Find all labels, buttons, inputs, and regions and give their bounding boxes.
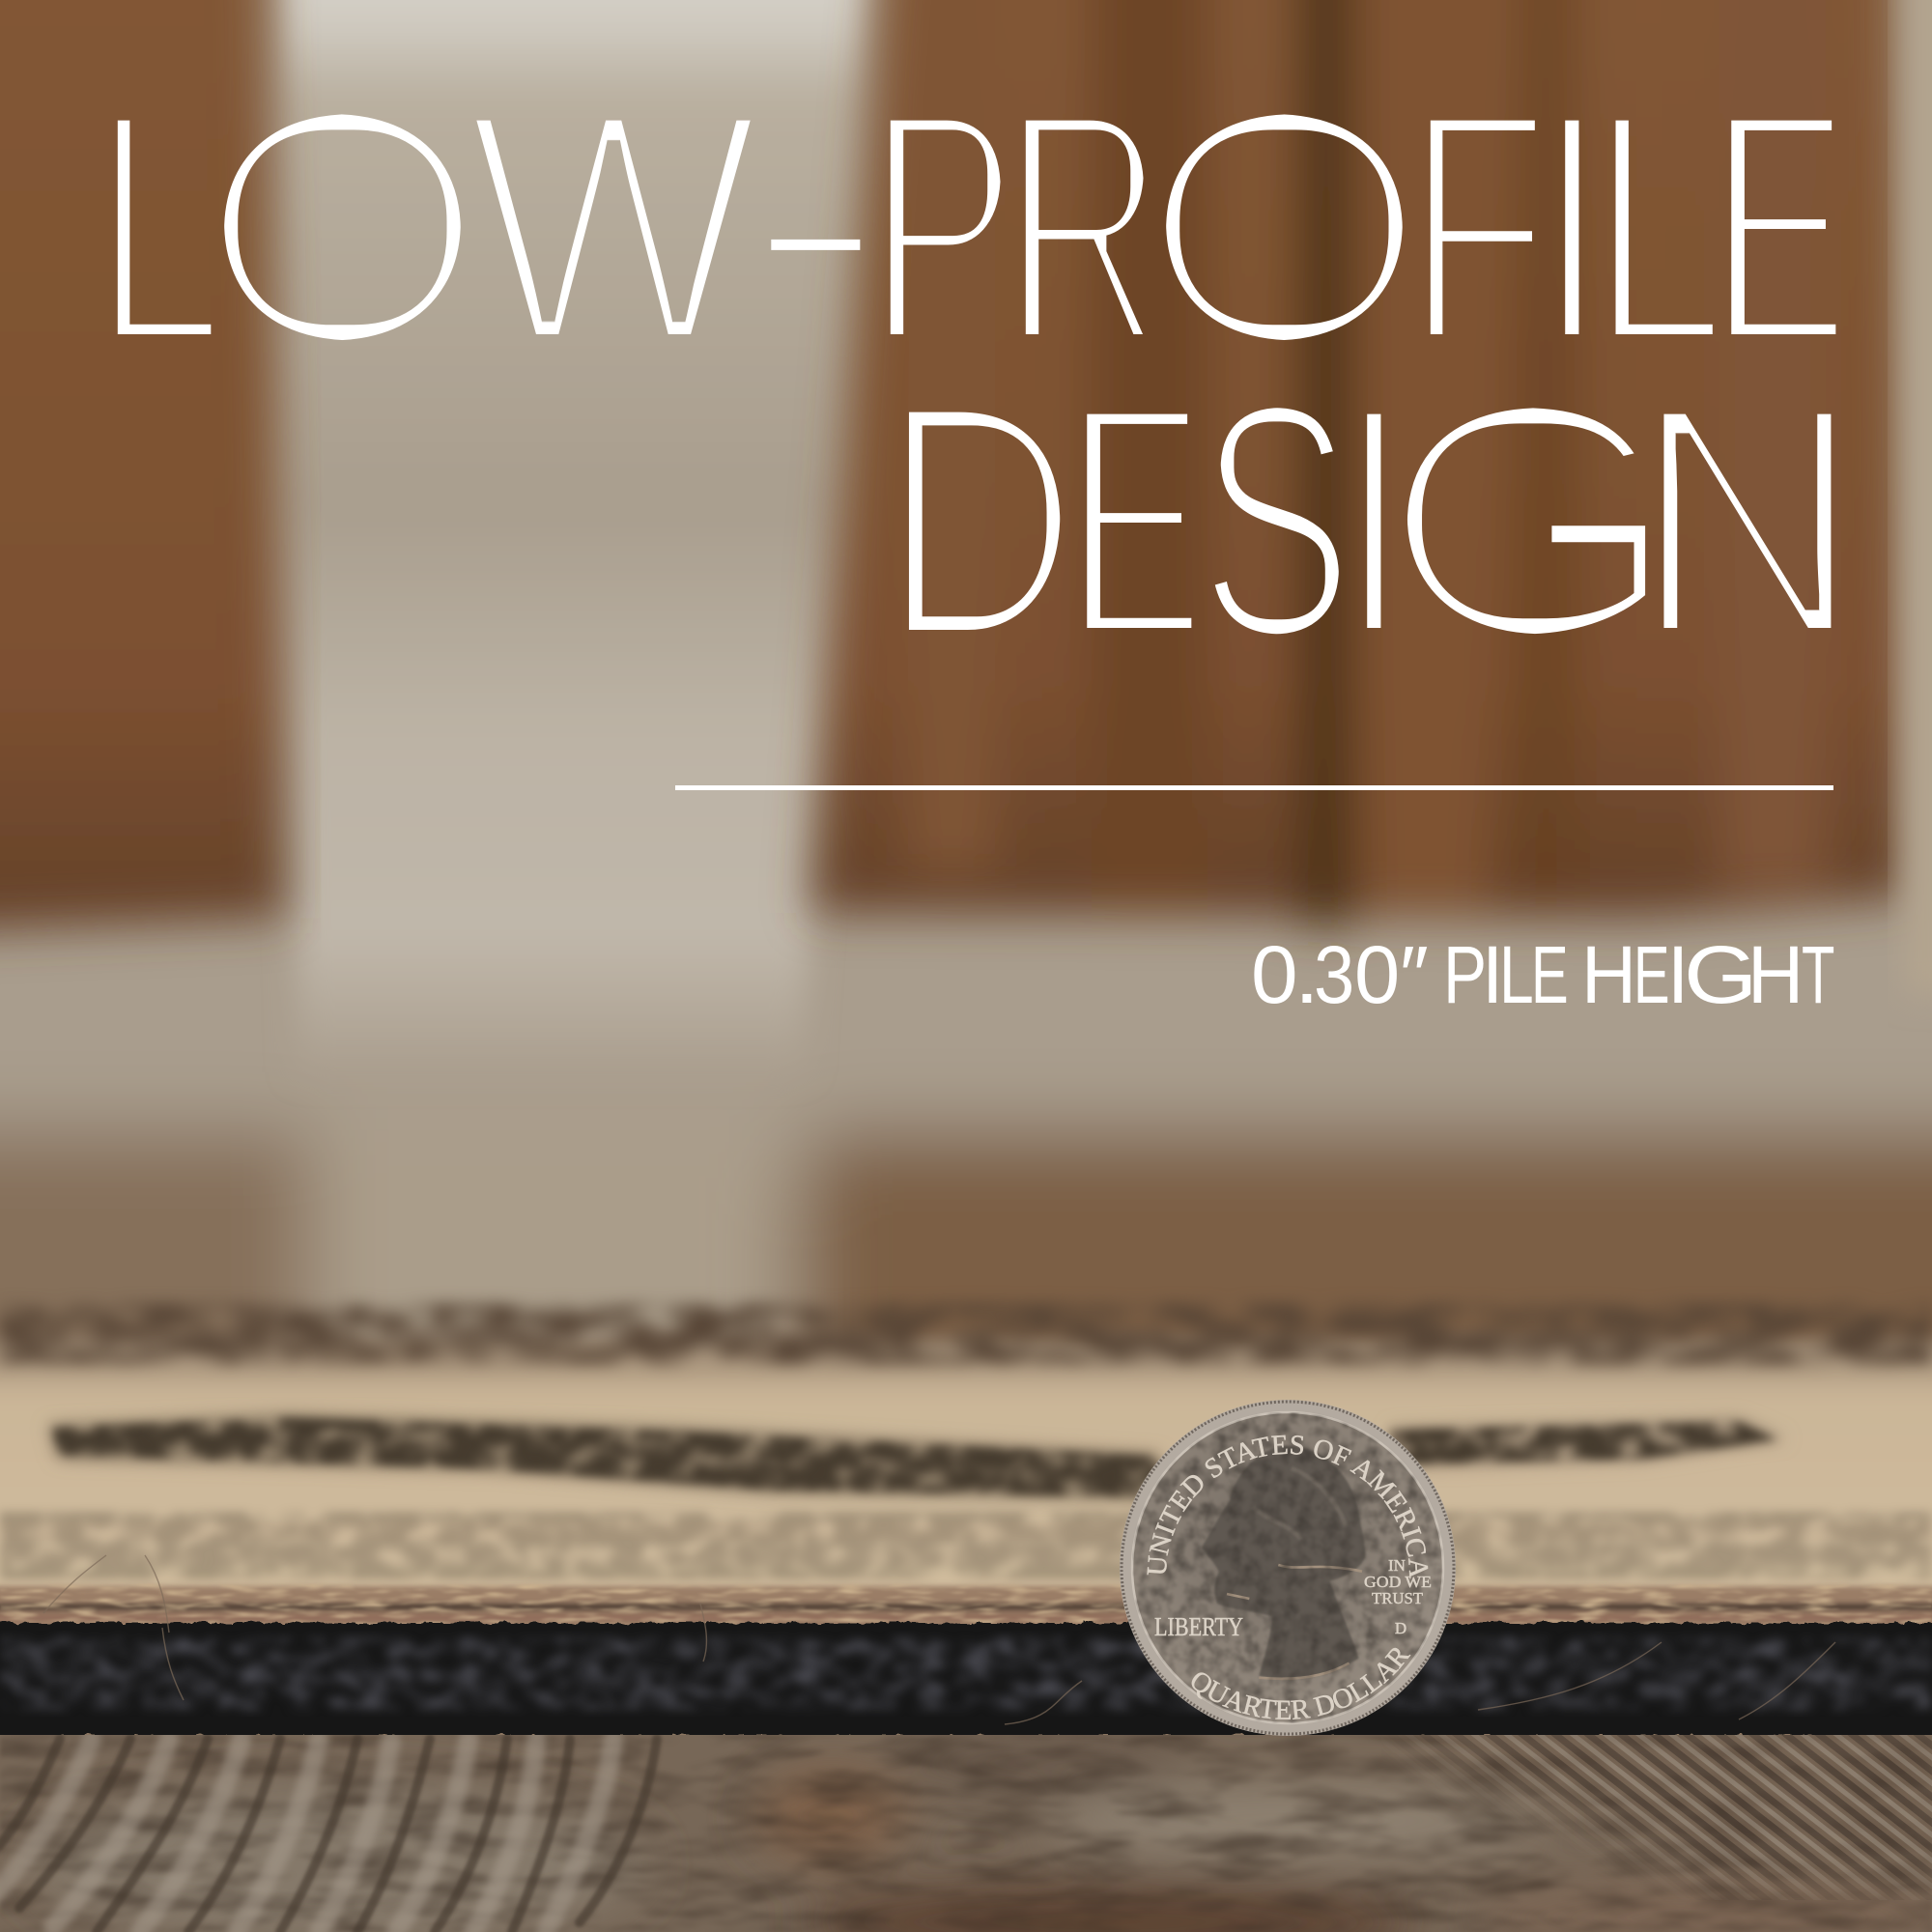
- title line 2: D: [880, 334, 1079, 707]
- rug yarn highlights: [0, 1637, 1932, 1710]
- subtitle: pile height: T: [1802, 929, 1834, 1020]
- wood mottling: [0, 1735, 1932, 1932]
- quarter dollar coin: [1120, 1400, 1456, 1736]
- wood grain, left: [0, 1739, 657, 1932]
- title line 1: R: [1004, 41, 1164, 413]
- subtitle: pile height: H: [1747, 929, 1804, 1020]
- subtitle: pile height: I: [1667, 929, 1689, 1020]
- rug surface, out of focus: [0, 1338, 1932, 1633]
- subtitle: pile height: G: [1684, 929, 1758, 1020]
- blurred left curtain: [0, 0, 285, 932]
- blurred room backdrop: [0, 0, 1932, 1420]
- title line 1: E: [1712, 41, 1847, 413]
- coin lettering: QUARTER DOLLAR: [1192, 1648, 1410, 1719]
- subtitle: pile height: ″: [1400, 929, 1429, 1020]
- coin lettering: UNITED STATES OF AMERICA: [1147, 1435, 1428, 1578]
- coin lettering: GOD WE: [1364, 1573, 1432, 1591]
- subtitle: pile height: 3: [1314, 929, 1354, 1020]
- subtitle: pile height: .: [1294, 929, 1319, 1020]
- wood floor: [0, 1729, 1932, 1932]
- title line 1: W: [465, 41, 762, 413]
- coin lettering: D: [1395, 1619, 1406, 1637]
- title line 1: I: [1525, 41, 1618, 413]
- title line 2: [880, 334, 1864, 707]
- blurred window and wall: [275, 0, 874, 1072]
- coin lettering: LIBERTY: [1154, 1612, 1243, 1641]
- wood tone patches: [36, 1735, 1531, 1932]
- subtitle: pile height: P: [1443, 929, 1487, 1020]
- far right wall strip: [1903, 0, 1932, 995]
- title line 1: O: [195, 41, 490, 413]
- title line 1: -: [731, 33, 900, 404]
- title line 2: I: [1327, 334, 1420, 707]
- coin surface mottling: [1132, 1412, 1443, 1723]
- title line 2: N: [1631, 334, 1864, 707]
- title line 1: L: [94, 41, 223, 413]
- rug border stripes: [0, 1586, 1932, 1629]
- blurred right curtain: [811, 0, 1908, 927]
- rug far edge texture: [0, 1304, 1932, 1364]
- rug motif mottling: [53, 1418, 1777, 1497]
- subtitle: pile height: I: [1482, 929, 1503, 1020]
- title line 1: F: [1406, 41, 1548, 413]
- title line 1: O: [1137, 41, 1432, 413]
- subtitle: pile height: H: [1580, 929, 1636, 1020]
- coin rim: [1120, 1400, 1456, 1736]
- subtitle: pile height: 0: [1251, 929, 1298, 1020]
- title line 1: P: [868, 41, 1016, 413]
- title line 2: S: [1199, 334, 1353, 707]
- subtitle: pile height: 0: [1354, 929, 1400, 1020]
- subtitle: pile height: [1251, 929, 1834, 1020]
- divider rule: [675, 785, 1833, 790]
- wood ridges, right: [1413, 1735, 1932, 1899]
- subtitle: pile height: E: [1634, 929, 1670, 1020]
- title line 1: L: [1591, 41, 1725, 413]
- coin lettering: TRUST: [1372, 1589, 1424, 1607]
- title line 2: E: [1067, 334, 1203, 707]
- black braided rug edge: [0, 1623, 1932, 1736]
- coin portrait: [1202, 1446, 1365, 1679]
- subtitle: pile height: L: [1499, 929, 1534, 1020]
- rug border flecks: [0, 1584, 1932, 1627]
- title line 1: [94, 33, 1847, 634]
- coin lettering: [1147, 1435, 1432, 1719]
- coin lettering: IN: [1388, 1556, 1406, 1575]
- stray rug fibres: [43, 1555, 1835, 1724]
- title line 2: G: [1376, 334, 1687, 707]
- rug speckled band: [0, 1512, 1932, 1579]
- rug dark motif band: [48, 1414, 1787, 1499]
- subtitle: pile height: E: [1531, 929, 1569, 1020]
